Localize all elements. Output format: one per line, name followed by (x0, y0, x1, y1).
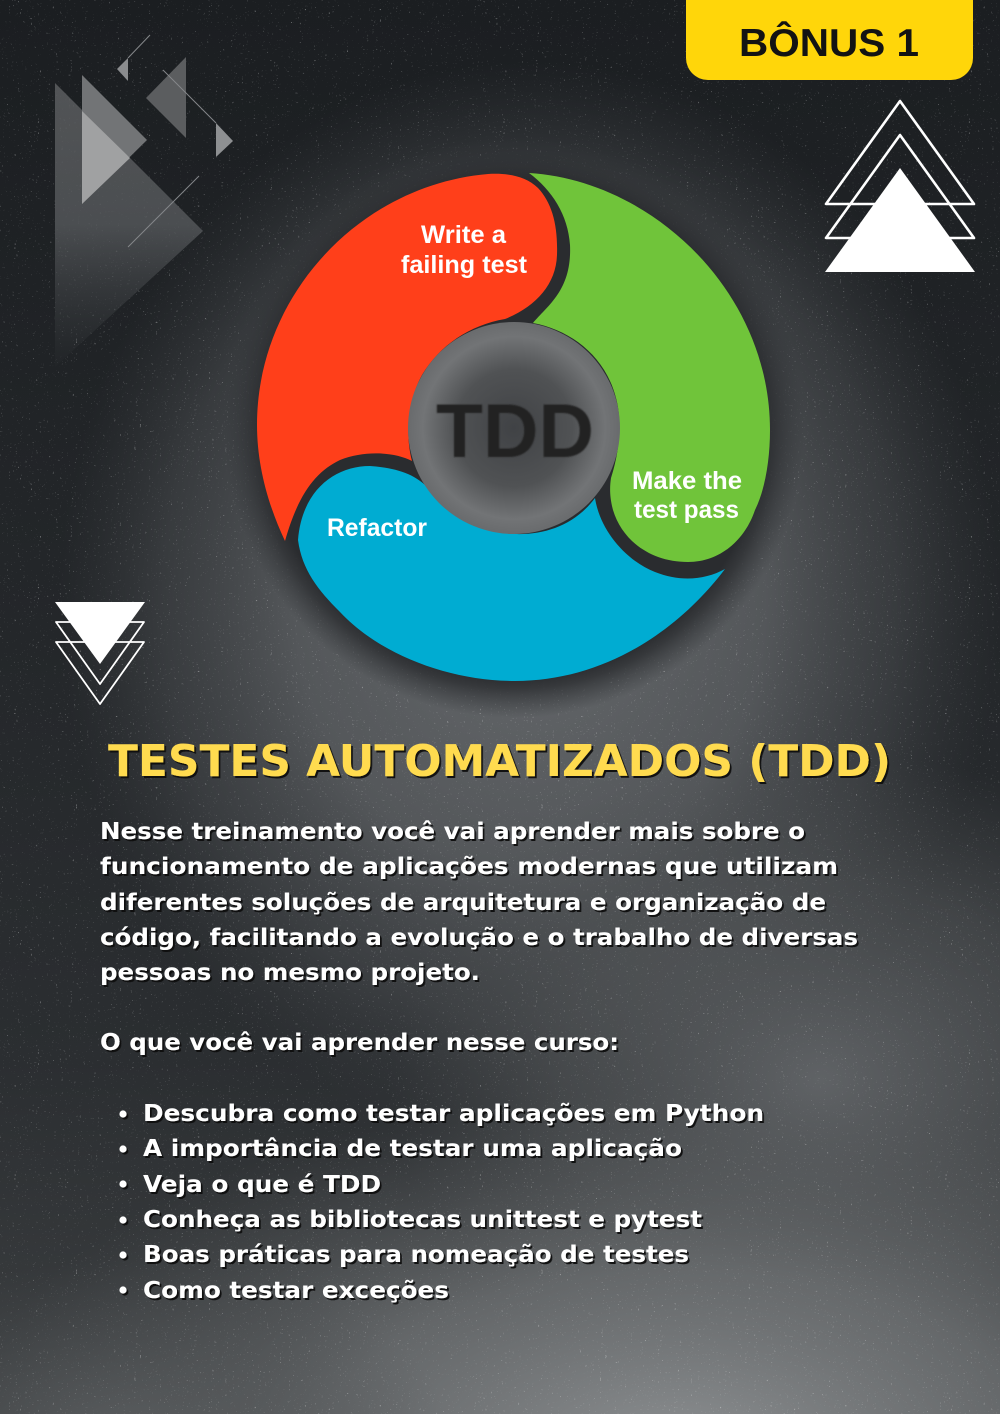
title: TESTES AUTOMATIZADOS (TDD) (108, 736, 891, 787)
list: course topics: Como testar exceções (143, 1276, 449, 1304)
text block: description: pessoas no mesmo projeto. (100, 958, 480, 986)
chart: TDD cycle wheel (224, 138, 804, 718)
hub: TDD (436, 389, 594, 474)
list: course topics: Boas práticas para nomeação de testes (143, 1240, 689, 1268)
text block: description: diferentes soluções de arquitetura e organização de (100, 888, 826, 916)
text block: description: Nesse treinamento você vai aprender mais sobre o (100, 817, 805, 845)
decorative geometric triangles top left (55, 35, 233, 367)
list: course topics: Veja o que é TDD (143, 1170, 381, 1198)
hub (408, 322, 620, 534)
list: course topics (119, 1099, 764, 1304)
segment: red write a failing test (257, 174, 557, 541)
badge: Bônus 1 (686, 0, 973, 80)
text block: description: código, facilitando a evolução e o trabalho de diversas (100, 923, 858, 951)
text block: description (100, 817, 858, 986)
icon: triangles pointing up (825, 101, 975, 272)
label: test pass (634, 496, 739, 524)
text block: course intro: O que você vai aprender nesse curso: (100, 1028, 619, 1056)
list: course topics: A importância de testar uma aplicação (143, 1134, 682, 1162)
list: course topics: Conheça as bibliotecas unittest e pytest (143, 1205, 702, 1233)
segment: blue refactor (298, 466, 725, 681)
list: course topics: Descubra como testar aplicações em Python (143, 1099, 764, 1127)
badge: Bônus 1: BÔNUS 1 (739, 20, 919, 65)
label: Refactor (327, 514, 427, 542)
segment: green make the test pass (529, 173, 770, 562)
label: Write a (421, 221, 507, 249)
icon: triangles pointing down (55, 602, 145, 704)
text block: description: funcionamento de aplicações modernas que utilizam (100, 852, 838, 880)
label: failing test (401, 251, 528, 279)
label: Make the (632, 467, 742, 495)
